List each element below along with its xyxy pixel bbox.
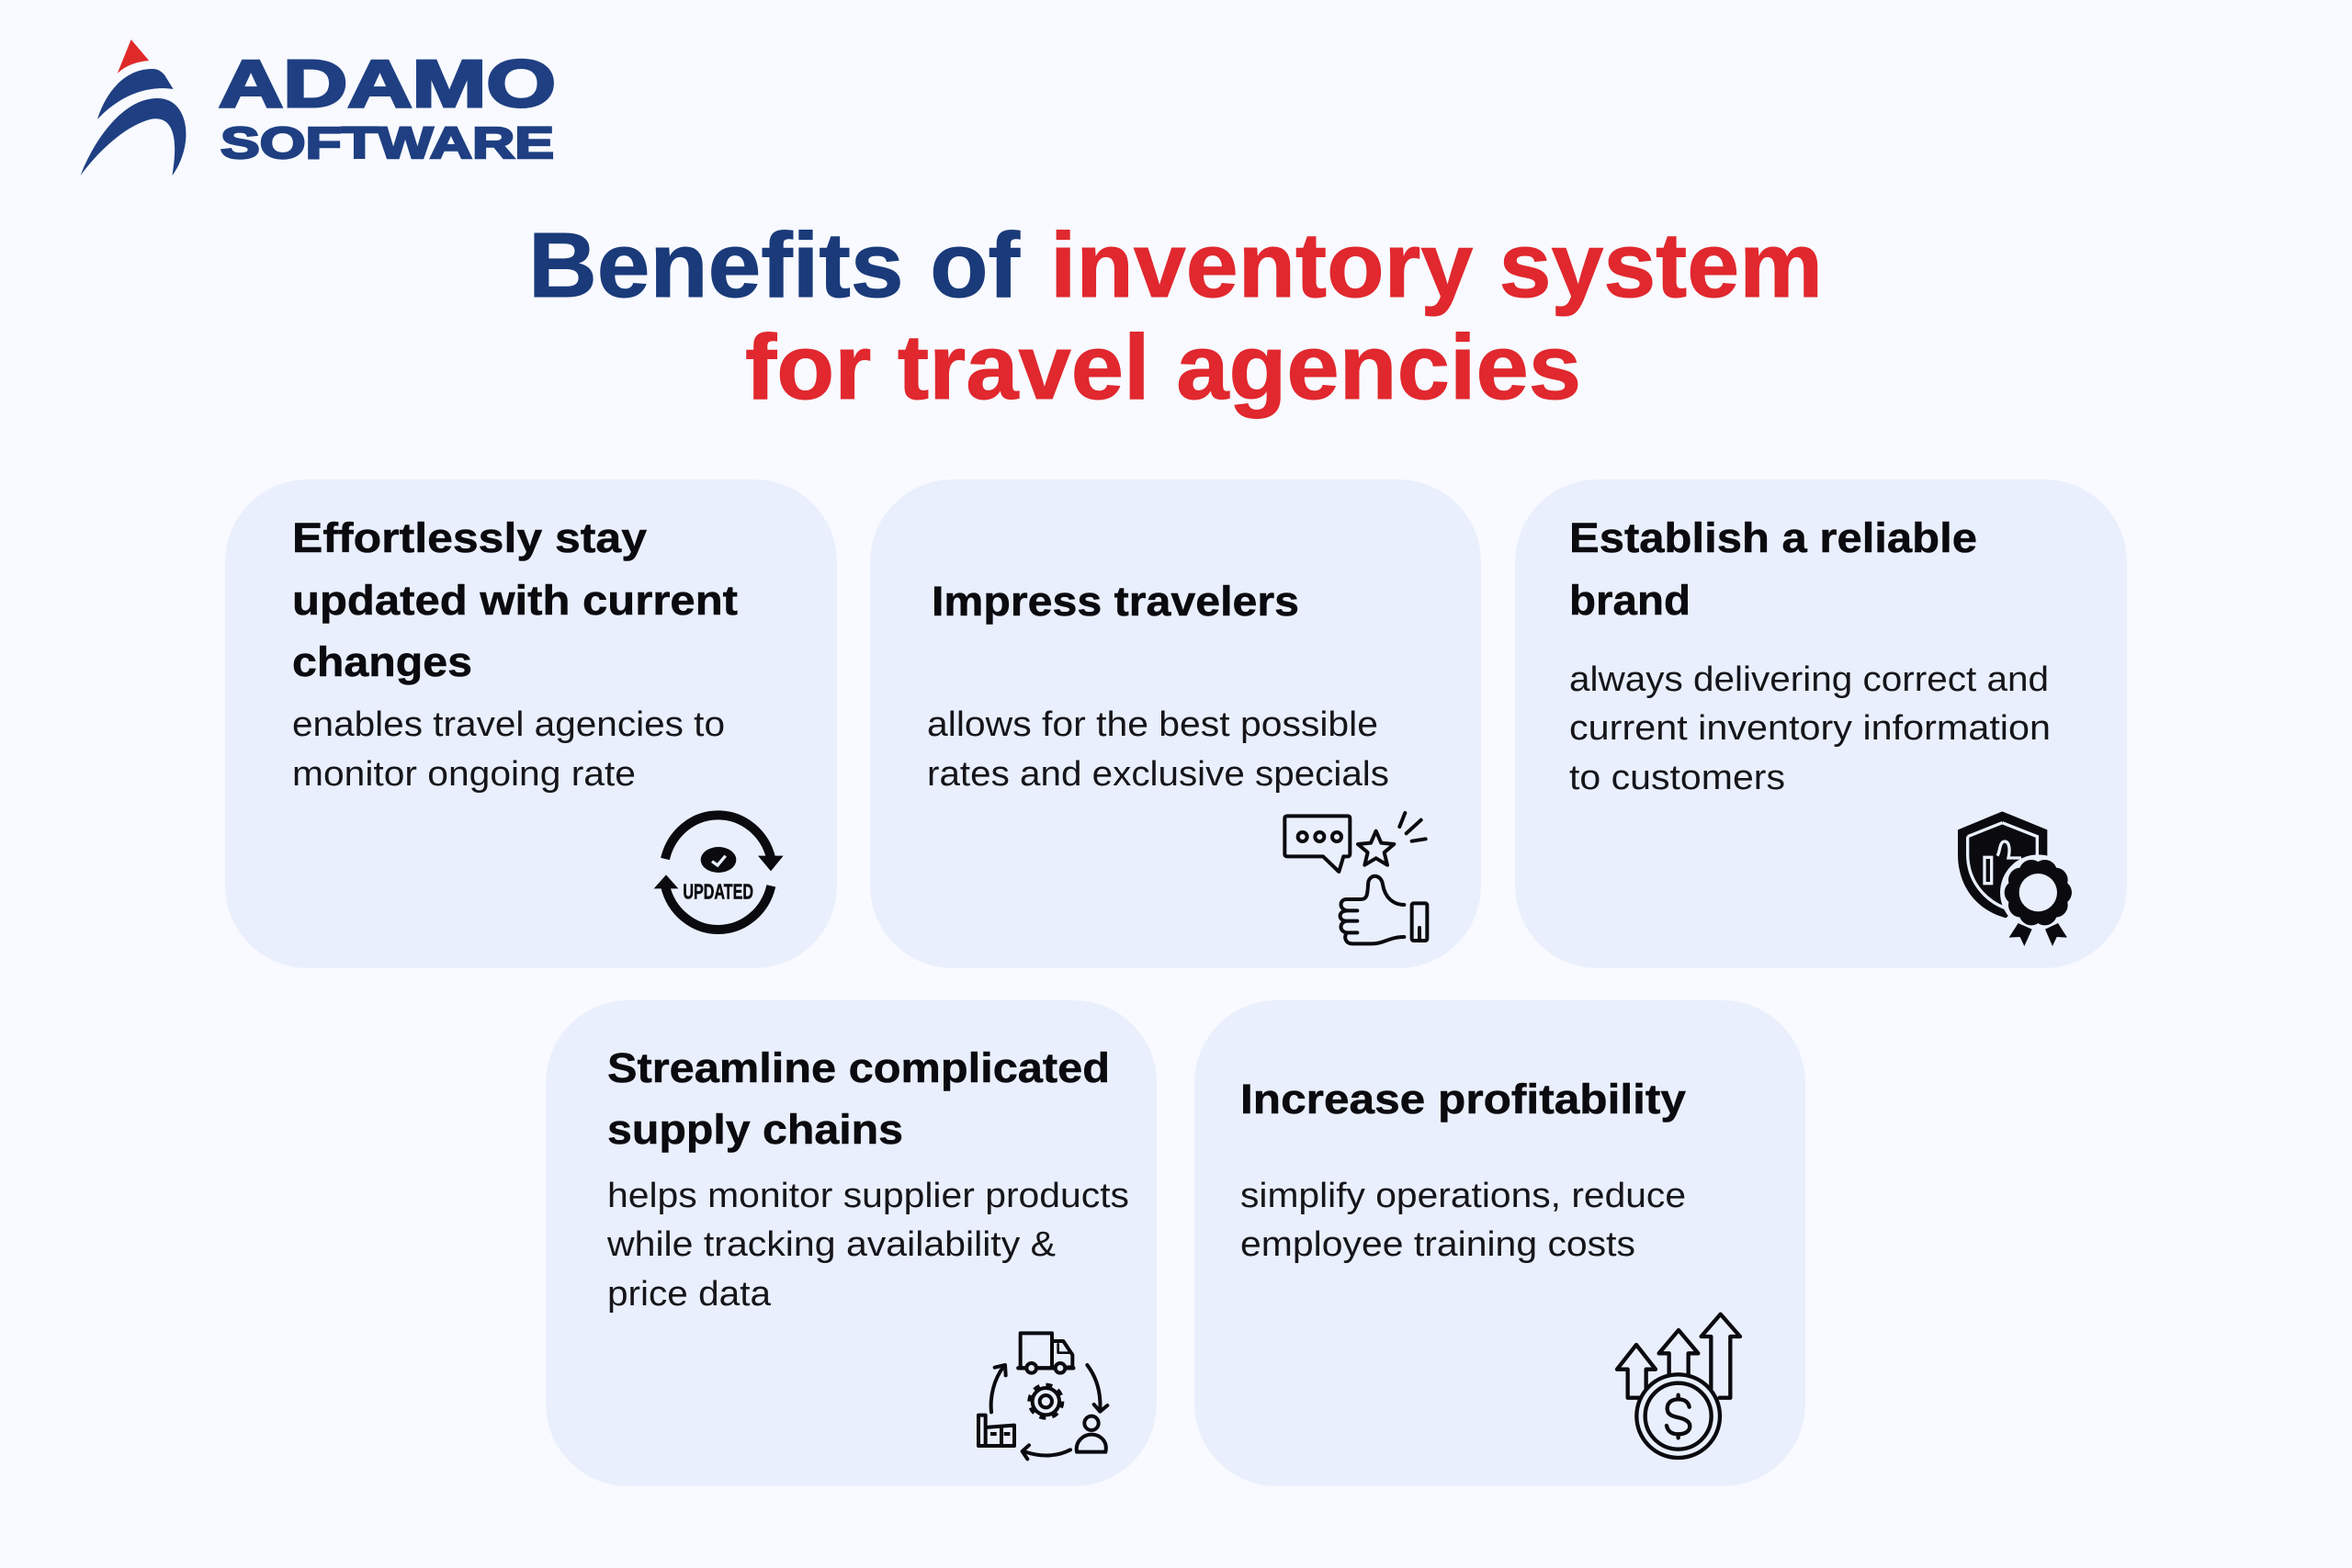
description: increase profitability: employee training costs <box>1240 1225 1635 1264</box>
logo wordmark <box>219 48 556 168</box>
heading: supply chains <box>607 1044 1110 1153</box>
panel: stay updated <box>225 479 837 968</box>
heading: stay updated: Effortlessly stay <box>292 514 647 561</box>
description: reliable brand: current inventory information <box>1569 709 2051 748</box>
title: for travel agencies <box>745 316 1581 419</box>
panel: impress travelers <box>870 479 1481 968</box>
description: supply chains <box>606 1177 1129 1314</box>
description: stay updated: enables travel agencies to <box>292 705 725 744</box>
description: increase profitability: simplify operations, reduce <box>1240 1177 1686 1215</box>
description: reliable brand: always delivering correct and <box>1569 660 2049 699</box>
heading: reliable brand: brand <box>1569 577 1690 624</box>
description: reliable brand <box>1569 660 2051 797</box>
description: stay updated <box>292 705 725 794</box>
heading: supply chains: Streamline complicated <box>607 1044 1110 1091</box>
heading: impress travelers: Impress travelers <box>932 578 1299 625</box>
description: supply chains: helps monitor supplier products <box>607 1177 1129 1215</box>
icon: rating and thumbs up <box>1284 813 1427 943</box>
heading: stay updated: changes <box>292 638 472 685</box>
panel: reliable brand <box>1515 479 2127 968</box>
panel: supply chains <box>546 1000 1157 1486</box>
panel: increase profitability <box>1194 1000 1805 1486</box>
heading: stay updated: updated with current <box>292 577 738 624</box>
heading: reliable brand: Establish a reliable <box>1569 514 1977 561</box>
heading: increase profitability: Increase profitability <box>1240 1076 1686 1122</box>
title <box>528 214 1823 419</box>
description: stay updated: monitor ongoing rate <box>292 755 636 794</box>
heading: supply chains: supply chains <box>607 1106 903 1153</box>
icon: updated cycle <box>654 815 784 930</box>
description: reliable brand: to customers <box>1569 759 1785 797</box>
description: impress travelers: rates and exclusive specials <box>927 755 1389 794</box>
heading: stay updated <box>292 514 738 685</box>
description: supply chains: price data <box>607 1275 772 1314</box>
icon: rising profit coin <box>1617 1314 1740 1458</box>
description: impress travelers <box>927 705 1389 794</box>
heading: reliable brand <box>1569 514 1977 624</box>
logo mark <box>81 39 186 175</box>
icon: shield and badge <box>1958 811 2076 946</box>
icon: supply chain cycle <box>978 1333 1107 1459</box>
description: impress travelers: allows for the best possible <box>927 705 1378 744</box>
title: Benefits of <box>528 214 1021 317</box>
logo wordmark: SOFTWARE <box>220 119 554 168</box>
logo wordmark: ADAMO <box>219 48 556 121</box>
description: increase profitability <box>1240 1177 1686 1264</box>
description: supply chains: while tracking availability & <box>606 1225 1056 1264</box>
icon: updated cycle: UPDATED <box>683 879 753 903</box>
title: inventory system <box>1050 214 1823 317</box>
logo: Adamo Software <box>81 39 556 175</box>
